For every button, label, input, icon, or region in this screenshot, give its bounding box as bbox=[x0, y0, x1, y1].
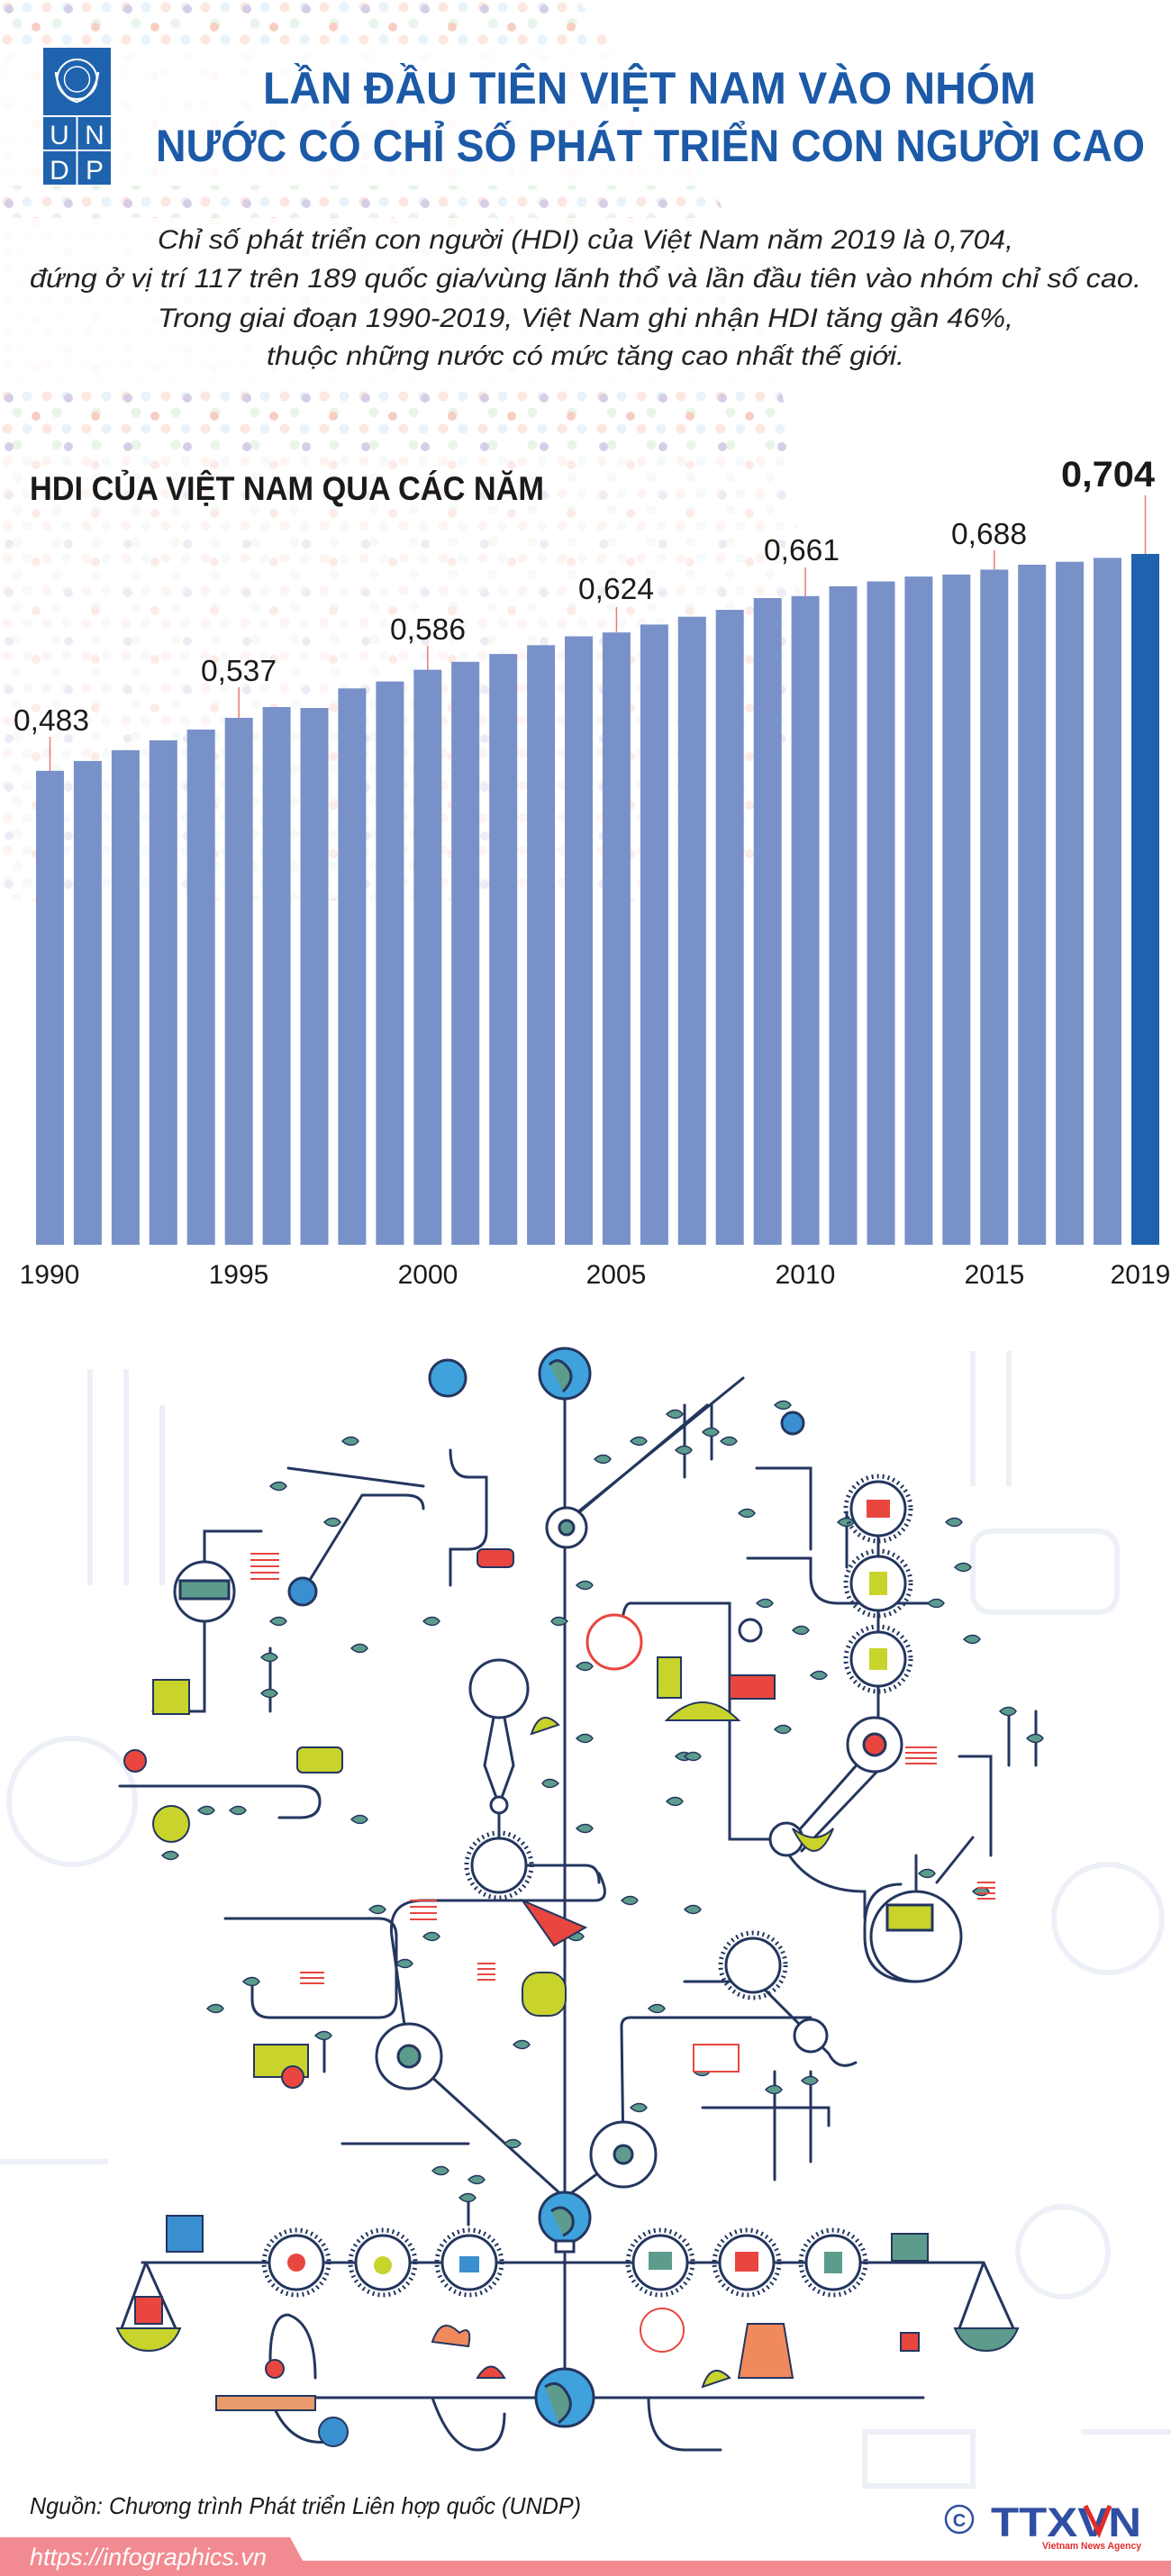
faint background icons bbox=[0, 1351, 1171, 2486]
circle nodes bbox=[175, 1412, 961, 2187]
bar chart: 0,661 bbox=[764, 533, 840, 567]
intro text: đứng ở vị trí 117 trên 189 quốc gia/vùng lãnh thổ và lần đầu tiên vào nhóm chỉ số cao. bbox=[30, 264, 1141, 294]
footer band bbox=[0, 2537, 1171, 2576]
year axis labels: 2010 bbox=[776, 1260, 835, 1290]
source text: Nguồn: Chương trình Phát triển Liên hợp quốc (UNDP) bbox=[30, 2492, 581, 2519]
bar chart bbox=[14, 455, 1170, 1290]
background dots globe bbox=[0, 0, 800, 901]
logo: UNDP: U bbox=[50, 121, 69, 150]
logo: TTXVN: Vietnam News Agency bbox=[1042, 2541, 1142, 2552]
bar chart: 0,688 bbox=[951, 517, 1027, 550]
bar chart: 0,624 bbox=[578, 572, 654, 605]
intro text bbox=[30, 225, 1141, 371]
globes bbox=[430, 1348, 594, 2426]
sunburst icons bbox=[264, 1476, 911, 2295]
chart heading: HDI CỦA VIỆT NAM QUA CÁC NĂM bbox=[30, 469, 544, 507]
intro text: Trong giai đoạn 1990-2019, Việt Nam ghi nhận HDI tăng gần 46%, bbox=[158, 304, 1013, 333]
year axis labels: 2019 bbox=[1111, 1260, 1170, 1290]
value labels bbox=[50, 495, 1146, 771]
year axis labels: 2005 bbox=[586, 1260, 646, 1290]
logo: UNDP: N bbox=[85, 121, 104, 150]
network lines bbox=[120, 1378, 1036, 2450]
year axis labels bbox=[20, 1260, 1170, 1290]
logo: TTXVN: C bbox=[953, 2511, 966, 2531]
bar chart: 0,483 bbox=[14, 703, 89, 737]
year axis labels: 2015 bbox=[965, 1260, 1024, 1290]
title: LẦN ĐẦU TIÊN VIỆT NAM VÀO NHÓM bbox=[263, 63, 1036, 113]
logo: UNDP: D bbox=[50, 156, 69, 186]
illustration: sustainable development tree bbox=[0, 1348, 1171, 2486]
bar chart: 0,537 bbox=[201, 654, 277, 687]
bar chart: 0,586 bbox=[390, 612, 466, 646]
footer band: https://infographics.vn bbox=[30, 2544, 267, 2571]
accent shapes: animals, objects bbox=[117, 1549, 1018, 2446]
logo: TTXVN bbox=[946, 2499, 1142, 2552]
white bands bbox=[0, 49, 795, 186]
title bbox=[156, 63, 1145, 171]
bar chart: 0,704 bbox=[1061, 455, 1156, 494]
year axis labels: 1990 bbox=[20, 1260, 79, 1290]
year axis labels: 2000 bbox=[398, 1260, 458, 1290]
logo: TTXVN: TTXVN bbox=[991, 2499, 1141, 2545]
intro text: Chỉ số phát triển con người (HDI) của Việt Nam năm 2019 là 0,704, bbox=[158, 225, 1013, 255]
year axis labels: 1995 bbox=[209, 1260, 268, 1290]
intro text: thuộc những nước có mức tăng cao nhất thế giới. bbox=[267, 341, 904, 371]
logo: UNDP: P bbox=[86, 156, 104, 186]
leaves bbox=[162, 1401, 1043, 2201]
logo: UNDP bbox=[43, 48, 111, 186]
red stripes bbox=[250, 1554, 995, 1983]
